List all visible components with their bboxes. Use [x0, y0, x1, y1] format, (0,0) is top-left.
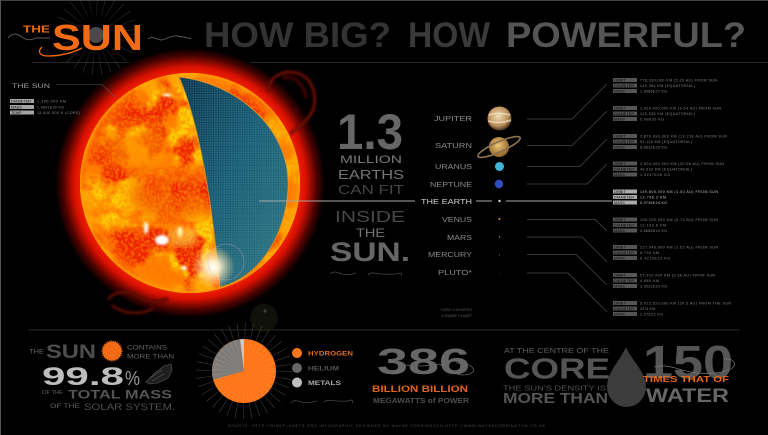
text block: 1.3 million earths: [330, 104, 410, 276]
footnote: * NOW CLASSIFIED: [440, 308, 472, 312]
stat: 99.8% of total mass: %: [125, 368, 140, 390]
data: saturn: ORBIT: [614, 106, 627, 110]
icon: water drop: [607, 347, 646, 407]
stat: 99.8% of total mass: TOTAL MASS: [68, 390, 172, 402]
stat: core density: TIMES THAT OF: [643, 375, 729, 384]
stat: core density: 150: [643, 336, 733, 388]
data: pluto: DIAMETER: [614, 307, 634, 311]
planet labels: JUPITER: [434, 116, 472, 123]
data: uranus: MASS: [614, 145, 625, 149]
stat: core density: CORE: [504, 354, 610, 386]
label: the sun facts: THE SUN: [12, 83, 50, 90]
saturn: [476, 133, 522, 161]
mercury: [499, 254, 500, 256]
stat: 99.8% of total mass: OF THE: [42, 390, 63, 396]
data: mars: MASS: [614, 256, 625, 260]
stat: 99.8% of total mass: OF THE: [50, 403, 81, 410]
logo: THE SUN: [8, 4, 191, 64]
planet labels: MARS: [447, 235, 472, 242]
stat: core density: WATER: [646, 386, 729, 407]
planets: [476, 106, 522, 273]
pie chart: sun composition: [204, 331, 284, 411]
data: uranus: 51,118 KM (EQUATORIAL): [640, 140, 692, 144]
text block: 1.3 million earths: 1.3: [337, 104, 403, 160]
earth: [498, 200, 501, 202]
icon: hand: [146, 364, 172, 384]
data: venus: ORBIT: [614, 218, 627, 222]
label: the sun facts: 1,390,000 KM: [37, 100, 66, 104]
data: mercury: 57,910,000 KM (0.38 AU) FROM SUN: [640, 274, 715, 278]
text block: 1.3 million earths: MILLION: [340, 154, 402, 166]
mars: [499, 236, 500, 238]
data: mars: [613, 245, 718, 260]
stat: 99.8% of total mass: THE: [29, 348, 45, 356]
stat: 99.8% of total mass: [29, 341, 175, 412]
text block: 1.3 million earths: EARTHS: [338, 167, 404, 182]
text block: 1.3 million earths: CAN FIT: [338, 182, 404, 197]
data: saturn: 120,536 KM (EQUATORIAL): [640, 112, 695, 116]
data: the earth: 5.9736E24 KG: [640, 201, 667, 205]
stat: core density: THE SUN'S DENSITY IS: [503, 384, 606, 392]
data: saturn: MASS: [614, 117, 625, 121]
data: mars: 6,794 KM: [640, 251, 659, 255]
label: the sun facts: 15,600,000 K (CORE): [37, 111, 80, 115]
data: saturn: [613, 106, 721, 122]
data: pluto: [613, 301, 731, 316]
data: saturn: 5.68E26 KG: [640, 118, 664, 122]
planet labels: [421, 116, 472, 277]
stat: 99.8% of total mass: 99.8: [42, 363, 124, 391]
data: jupiter: ORBIT: [614, 78, 627, 82]
data: mercury: 3.3022E23 KG: [640, 284, 667, 288]
data: the earth: [613, 190, 718, 205]
footnote: [440, 308, 473, 318]
title: how big, how powerful: HOW BIG?: [204, 16, 391, 55]
data: jupiter: 1.8986E27 KG: [640, 90, 667, 94]
footer: source credit: SOURCE: HTTP://NINEPLANETS.ORG INFOGRAPHIC DESIGNED BY WAYNE DORRINGTON HTTP://WWW.WAYNEDORRINGTON.CO.UK: [228, 424, 546, 428]
planet labels: SATURN: [435, 143, 472, 150]
title: how big, how powerful: POWERFUL?: [506, 16, 746, 55]
planet labels: VENUS: [442, 217, 472, 224]
earth comparison line: [259, 200, 612, 202]
data: mars: 227,940,000 KM (1.52 AU) FROM SUN: [640, 246, 718, 250]
data: mercury: DIAMETER: [614, 279, 634, 283]
data: the earth: DIAMETER: [614, 195, 634, 199]
legend: composition: HELIUM: [308, 366, 339, 372]
data: neptune: 1.0247E26 KG: [640, 173, 670, 177]
data: mercury: ORBIT: [614, 273, 627, 277]
planet labels: URANUS: [435, 164, 472, 171]
data: uranus: 8.6832E25 KG: [640, 146, 667, 150]
data: uranus: [613, 134, 727, 150]
data: mars: DIAMETER: [614, 251, 634, 255]
legend: composition: METALS: [308, 380, 342, 387]
data: the earth: MASS: [614, 201, 625, 205]
text block: 1.3 million earths: THE: [356, 226, 385, 240]
text block: 1.3 million earths: INSIDE: [335, 209, 405, 226]
data: the earth: ORBIT: [614, 190, 627, 194]
connector lines: [527, 84, 607, 312]
sun surface: [78, 71, 302, 295]
stat: core density: [503, 336, 734, 407]
data: saturn: DIAMETER: [614, 112, 634, 116]
planet labels: MERCURY: [428, 252, 472, 259]
data: jupiter: MASS: [614, 89, 625, 93]
solar prominences: [108, 72, 315, 313]
data: uranus: ORBIT: [614, 134, 627, 138]
stat: 99.8% of total mass: SOLAR SYSTEM.: [84, 402, 175, 412]
neptune: [495, 180, 503, 188]
data: neptune: MASS: [614, 173, 625, 177]
data: mars: ORBIT: [614, 245, 627, 249]
data: venus: 108,200,000 KM (0.72 AU) FROM SUN: [640, 218, 718, 222]
data: pluto: ORBIT: [614, 301, 627, 305]
data: jupiter: [613, 78, 717, 94]
planet labels: THE EARTH: [421, 199, 472, 206]
data: venus: 4.8685E24 KG: [640, 229, 667, 233]
label: the sun facts: 1.9891E30 KG: [37, 106, 64, 110]
data: saturn: 1,429,400,000 KM (9.54 AU) FROM SUN: [640, 106, 721, 110]
label: the sun facts: MASS: [11, 105, 22, 109]
data: venus: MASS: [614, 229, 625, 233]
stat: 386 billion billion megawatts: [372, 341, 474, 405]
data: pluto: 1.27E22 KG: [640, 312, 663, 316]
logo: THE SUN: SUN: [52, 17, 143, 58]
data: venus: 12,103.6 KM: [640, 224, 666, 228]
planet labels: PLUTO*: [438, 270, 472, 277]
title: how big, how powerful: [204, 16, 746, 55]
data: uranus: 2,870,990,000 KM (19.218 AU) FROM SUN: [640, 134, 727, 138]
data: uranus: DIAMETER: [614, 140, 634, 144]
legend: composition: [291, 348, 353, 403]
data: neptune: DIAMETER: [614, 167, 634, 171]
stat: 99.8% of total mass: SUN: [46, 342, 96, 363]
icon: sun disc: [102, 341, 122, 361]
legend: composition: HYDROGEN: [308, 350, 353, 358]
sun cross-section: [179, 77, 288, 287]
solar flare: [191, 244, 278, 332]
data: pluto: 5,913,520,000 KM (39.5 AU) FROM THE SUN: [640, 302, 731, 306]
data: mercury: MASS: [614, 284, 625, 288]
stat: 386 billion billion megawatts: 386: [377, 341, 470, 382]
title: how big, how powerful: HOW: [408, 16, 490, 55]
panel: the sun illustration: [55, 48, 325, 332]
uranus: [495, 162, 504, 171]
stat: 99.8% of total mass: MORE THAN: [127, 354, 174, 360]
logo: THE SUN: THE: [23, 24, 50, 36]
label: the sun facts: [10, 83, 115, 115]
data: the earth: 149,600,000 KM (1.00 AU) FROM SUN: [640, 190, 718, 194]
text block: 1.3 million earths: SUN.: [330, 237, 410, 267]
data: neptune: [613, 162, 724, 177]
stat: core density: MORE THAN: [503, 391, 608, 407]
data: jupiter: DIAMETER: [614, 84, 634, 88]
pluto: [498, 272, 501, 274]
label: the sun facts: DIAMETER: [11, 99, 31, 103]
data: pluto: 2274 KM: [640, 307, 655, 311]
jupiter: [488, 106, 512, 130]
data: neptune: ORBIT: [614, 162, 627, 166]
data: mars: 6.4219E23 KG: [640, 256, 670, 260]
data: pluto: MASS: [614, 312, 625, 316]
data: neptune: 49,532 KM (EQUATORIAL): [640, 168, 692, 172]
stat: 386 billion billion megawatts: MEGAWATTS of POWER: [373, 396, 470, 405]
data: venus: DIAMETER: [614, 223, 634, 227]
label: the sun facts: TEMP: [11, 111, 22, 115]
data: the earth: 12,756.3 KM: [640, 196, 666, 200]
data: jupiter: 142,984 KM (EQUATORIAL): [640, 84, 695, 88]
data: mercury: [613, 273, 715, 288]
venus: [498, 218, 500, 220]
stat: core density: AT THE CENTRE OF THE: [504, 346, 609, 355]
stat: 386 billion billion megawatts: BILLION BILLION: [372, 384, 468, 395]
sun glow: [55, 48, 325, 318]
data: jupiter: 778,330,000 KM (5.20 AU) FROM SUN: [640, 78, 717, 82]
stat: 99.8% of total mass: CONTAINS: [127, 344, 167, 352]
footnote: A DWARF PLANET: [442, 314, 473, 318]
data: venus: [613, 218, 718, 233]
data: mercury: 4,880 KM: [640, 279, 659, 283]
data: neptune: 4,504,000,000 KM (30.06 AU) FROM SUN: [640, 162, 724, 166]
planet labels: NEPTUNE: [430, 182, 472, 189]
